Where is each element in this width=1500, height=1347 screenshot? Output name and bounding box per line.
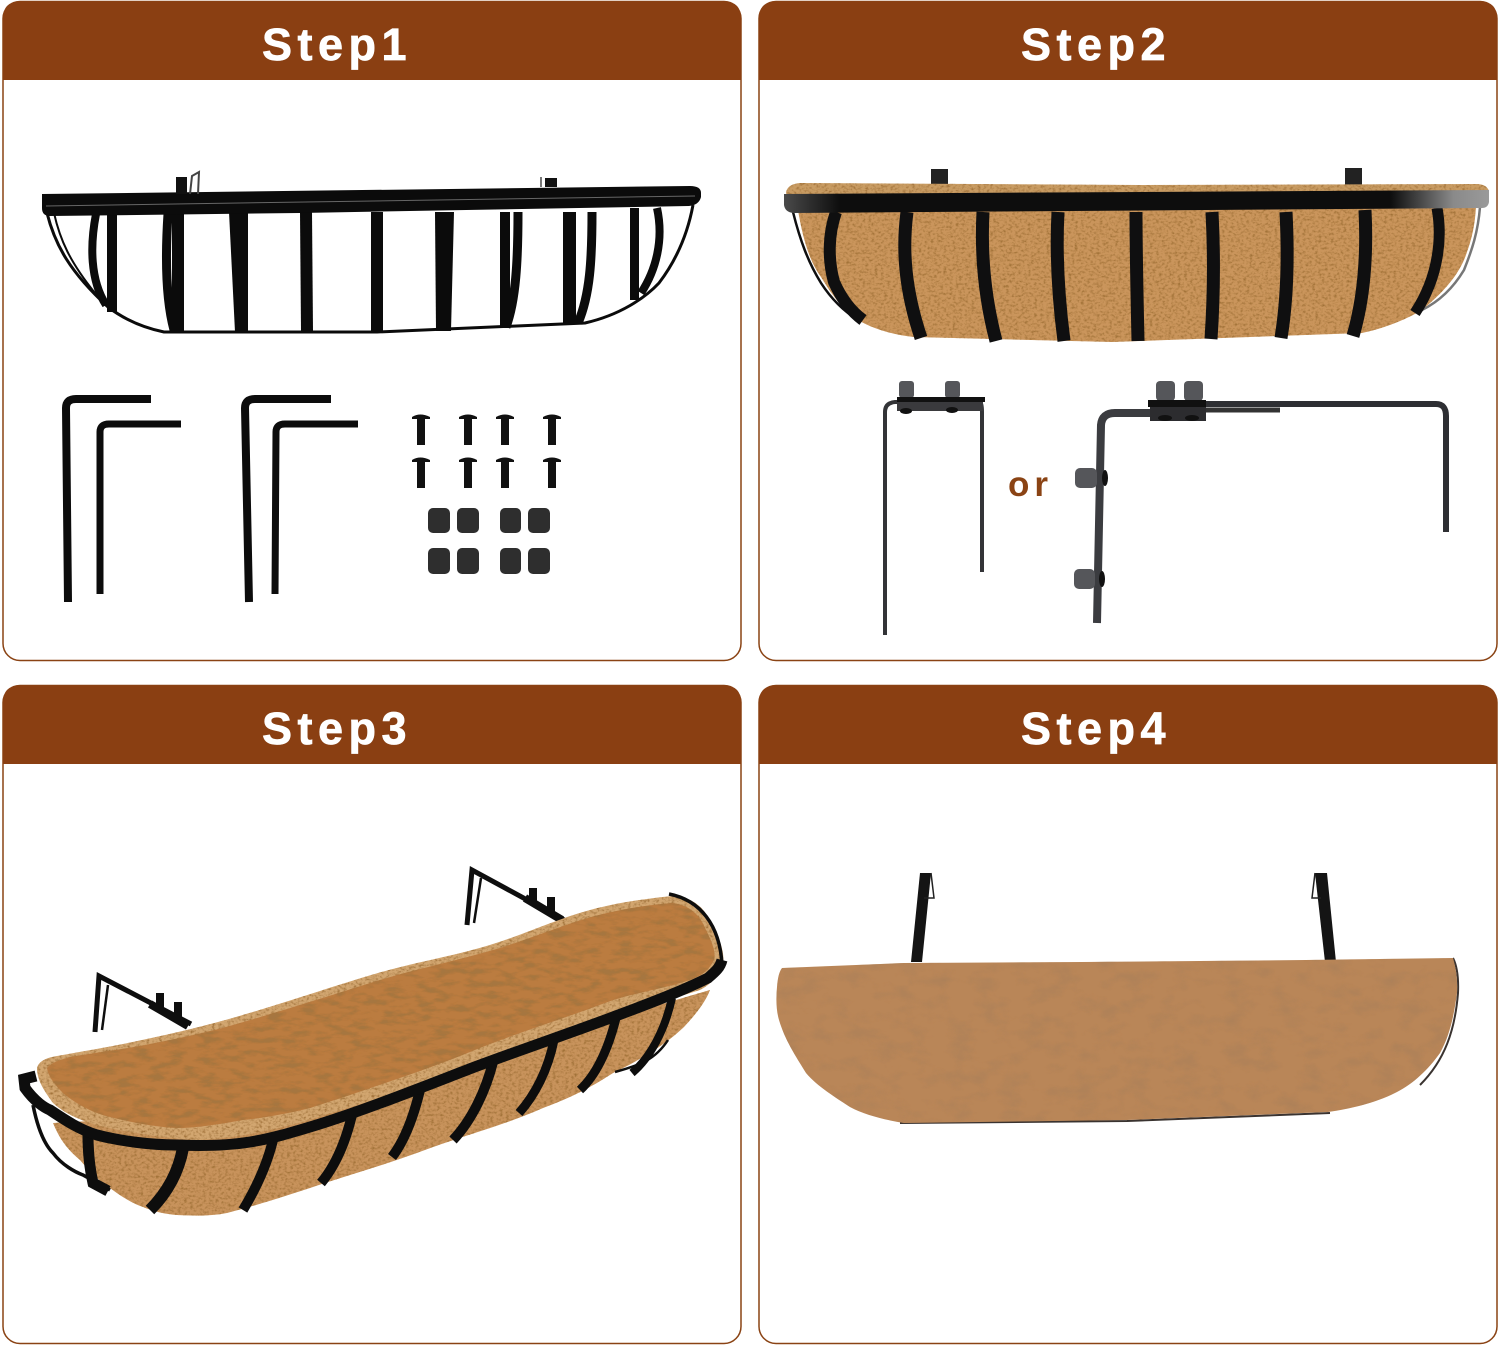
coir liner back view <box>776 958 1457 1123</box>
label: or: or <box>1008 465 1053 504</box>
panel: step 4 <box>759 686 1497 1344</box>
lined basket front view <box>784 168 1489 342</box>
heading: Step3: Step3 <box>262 703 412 754</box>
left hanger <box>911 873 934 962</box>
screws and nuts <box>412 414 561 574</box>
heading: Step1: Step1 <box>262 19 412 70</box>
panel: step 3 <box>3 686 741 1344</box>
brackets behind basket <box>95 870 564 1032</box>
L brackets <box>66 399 358 602</box>
metal edge behind liner <box>900 958 1458 1123</box>
lined basket angled view <box>24 894 723 1216</box>
heading: Step2: Step2 <box>1021 19 1171 70</box>
right hanger <box>1312 873 1336 962</box>
long bracket <box>1074 381 1446 623</box>
heading: Step4: Step4 <box>1021 703 1171 754</box>
short bracket <box>885 381 985 635</box>
panel: step 1 <box>3 2 741 660</box>
wire basket <box>42 172 701 332</box>
panel: step 2 <box>759 2 1497 660</box>
